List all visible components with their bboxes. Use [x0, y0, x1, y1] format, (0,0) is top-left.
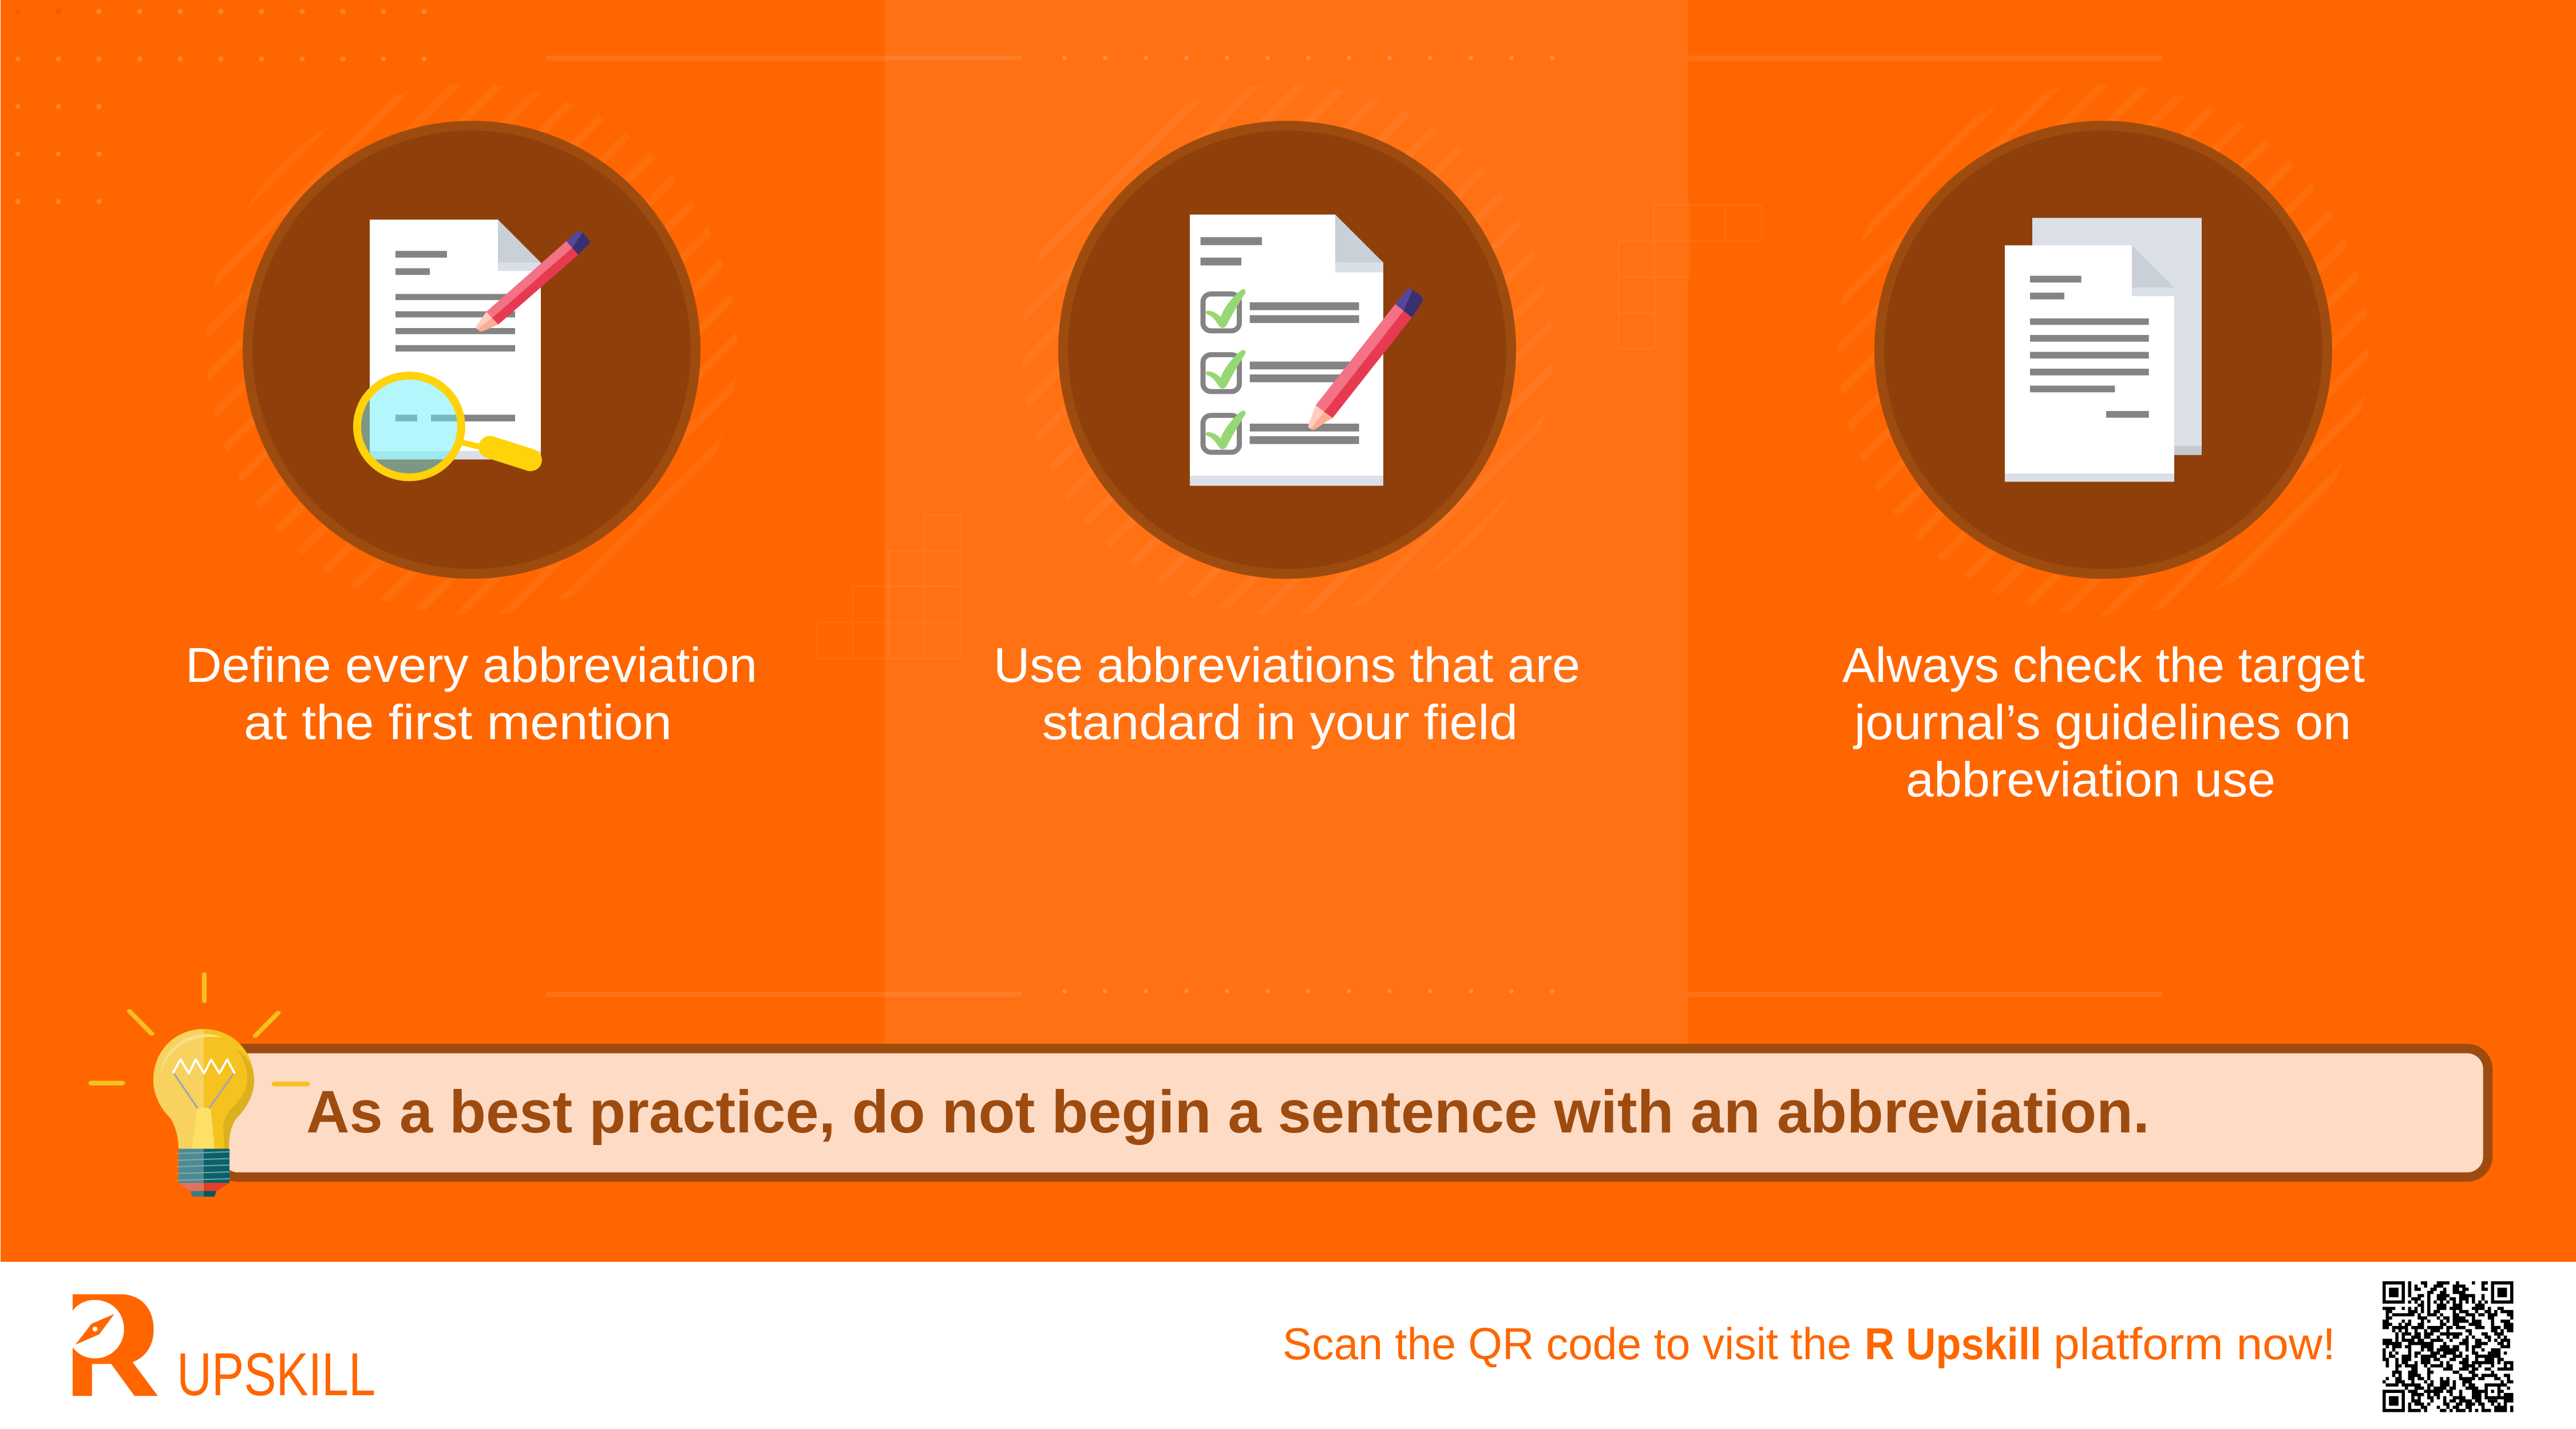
text: define every abbreviation: at the first mention [244, 696, 672, 750]
icon: checklist with pencil [1190, 215, 1423, 485]
text: check journal guidelines: journal’s guidelines on [1853, 696, 2351, 750]
icon: brown circle badge [1022, 84, 1553, 615]
panel: use standard abbreviations [994, 84, 1580, 750]
panel: define every abbreviation [185, 84, 757, 750]
callout: best practice banner [217, 1049, 2488, 1177]
icon: light bulb with rays [92, 974, 307, 1197]
footer call to action text: platform now! [2053, 1319, 2336, 1369]
text: use standard abbreviations: Use abbreviations that are [994, 638, 1580, 693]
icon: brown circle badge [1838, 84, 2369, 615]
text: use standard abbreviations [994, 638, 1580, 750]
logo: R Upskill: UPSKILL [177, 1341, 375, 1408]
QR code [2383, 1283, 2513, 1411]
text: check journal guidelines [1842, 638, 2365, 807]
text: check journal guidelines: abbreviation use [1906, 753, 2276, 807]
footer call to action text: Scan the QR code to visit the [1283, 1319, 1851, 1369]
footer: white strip [73, 1283, 2513, 1411]
footer call to action text [1283, 1319, 2336, 1369]
icon: stacked documents [2005, 218, 2202, 481]
icon: document with pencil and magnifier [357, 220, 589, 477]
footer call to action text: R Upskill [1865, 1319, 2041, 1369]
text: check journal guidelines: Always check the target [1842, 638, 2365, 693]
text: use standard abbreviations: standard in your field [1042, 696, 1518, 750]
text: define every abbreviation [185, 638, 757, 750]
logo: R Upskill [73, 1294, 375, 1408]
icon: brown circle badge [206, 84, 737, 615]
callout text: As a best practice, do not begin a sentence with an abbreviation. [306, 1079, 2150, 1146]
panel: check journal guidelines [1838, 84, 2369, 807]
text: define every abbreviation: Define every abbreviation [185, 638, 757, 693]
